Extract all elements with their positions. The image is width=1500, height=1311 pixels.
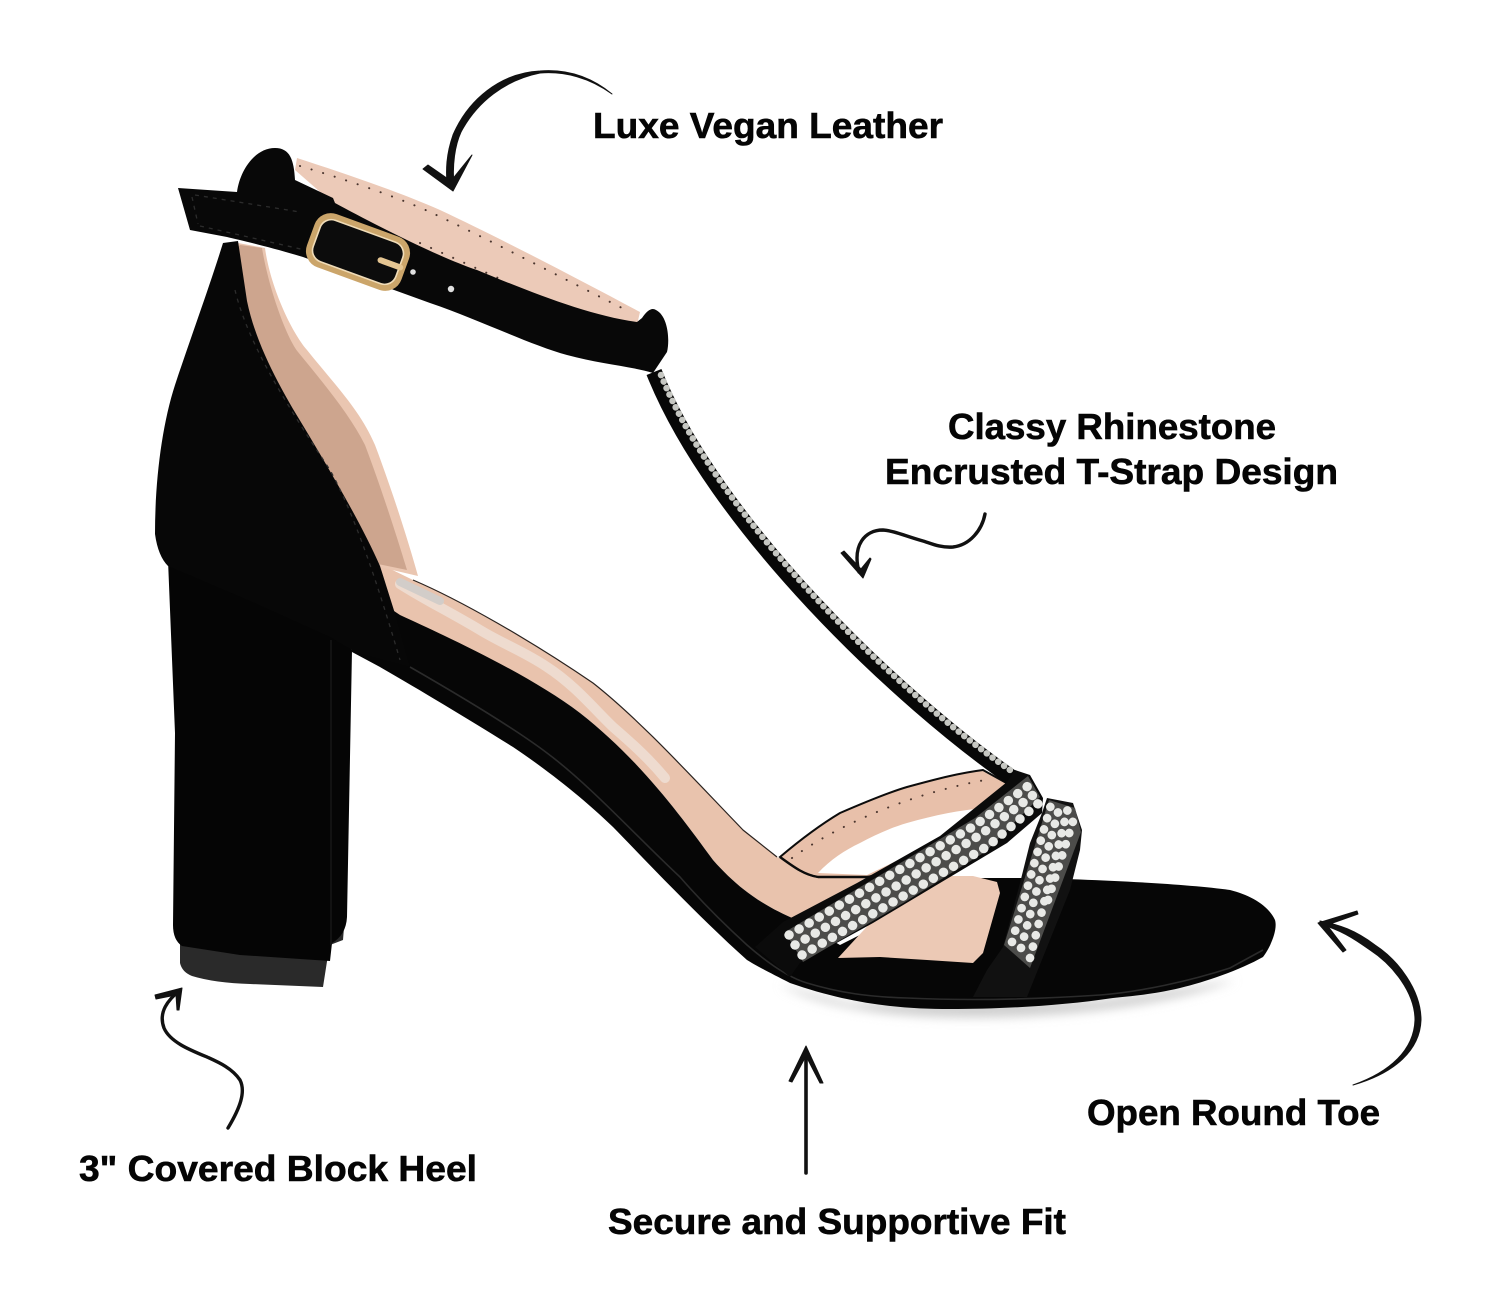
label: supportive fit: Secure and Supportive Fit — [608, 1201, 1066, 1242]
label: round toe: Open Round Toe — [1087, 1092, 1380, 1133]
insole sheen — [400, 584, 665, 778]
counter stitching — [235, 290, 400, 660]
arrow: vegan leather — [423, 71, 612, 191]
lining edge stitches — [792, 780, 985, 858]
gap behind side strap — [818, 808, 985, 875]
heel sole tip — [180, 915, 345, 987]
strap lower stitches — [420, 243, 507, 282]
block heel — [168, 560, 352, 961]
vertical rhinestone strap — [973, 798, 1082, 997]
arrow: round toe — [1318, 911, 1421, 1085]
arrow: block heel — [155, 988, 242, 1128]
diagonal rhinestone strap — [755, 770, 1043, 977]
ground shadow — [780, 980, 1235, 1018]
label: rhinestone design: Encrusted T-Strap Design — [885, 451, 1338, 492]
vertical strap stone bed — [1004, 800, 1081, 968]
label: block heel: 3" Covered Block Heel — [79, 1148, 477, 1189]
T-strap — [654, 372, 1018, 782]
strap thread — [192, 195, 305, 250]
forefoot insole — [838, 876, 1000, 963]
T-strap rhinestones — [661, 375, 1010, 770]
quarter suede lining — [225, 245, 407, 570]
insole silver patch — [400, 582, 440, 601]
side strap lining — [780, 770, 1010, 877]
arrow: supportive fit — [789, 1046, 823, 1173]
diagonal strap stone bed — [785, 776, 1040, 962]
side strap lower edge — [780, 857, 870, 877]
sandal illustration — [155, 148, 1276, 1018]
label: rhinestone design — [885, 406, 1338, 492]
ankle strap — [178, 148, 668, 373]
insole top edge — [413, 580, 777, 857]
quarter lining — [225, 243, 418, 576]
diagonal strap rhinestones — [789, 783, 1040, 955]
gold buckle — [305, 212, 411, 292]
insole arch — [372, 560, 867, 920]
black platform sole — [352, 605, 1276, 1009]
strap lining — [295, 158, 640, 325]
vertical strap rhinestones — [1012, 801, 1075, 958]
label: rhinestone design: Classy Rhinestone — [948, 406, 1276, 447]
heel side crease — [330, 640, 332, 945]
arrow: rhinestone strap — [841, 514, 985, 578]
heel counter — [155, 241, 410, 667]
sole edge line — [410, 667, 1263, 999]
label: vegan leather: Luxe Vegan Leather — [593, 105, 943, 146]
strap stitches — [300, 166, 630, 312]
strap holes — [410, 269, 454, 292]
